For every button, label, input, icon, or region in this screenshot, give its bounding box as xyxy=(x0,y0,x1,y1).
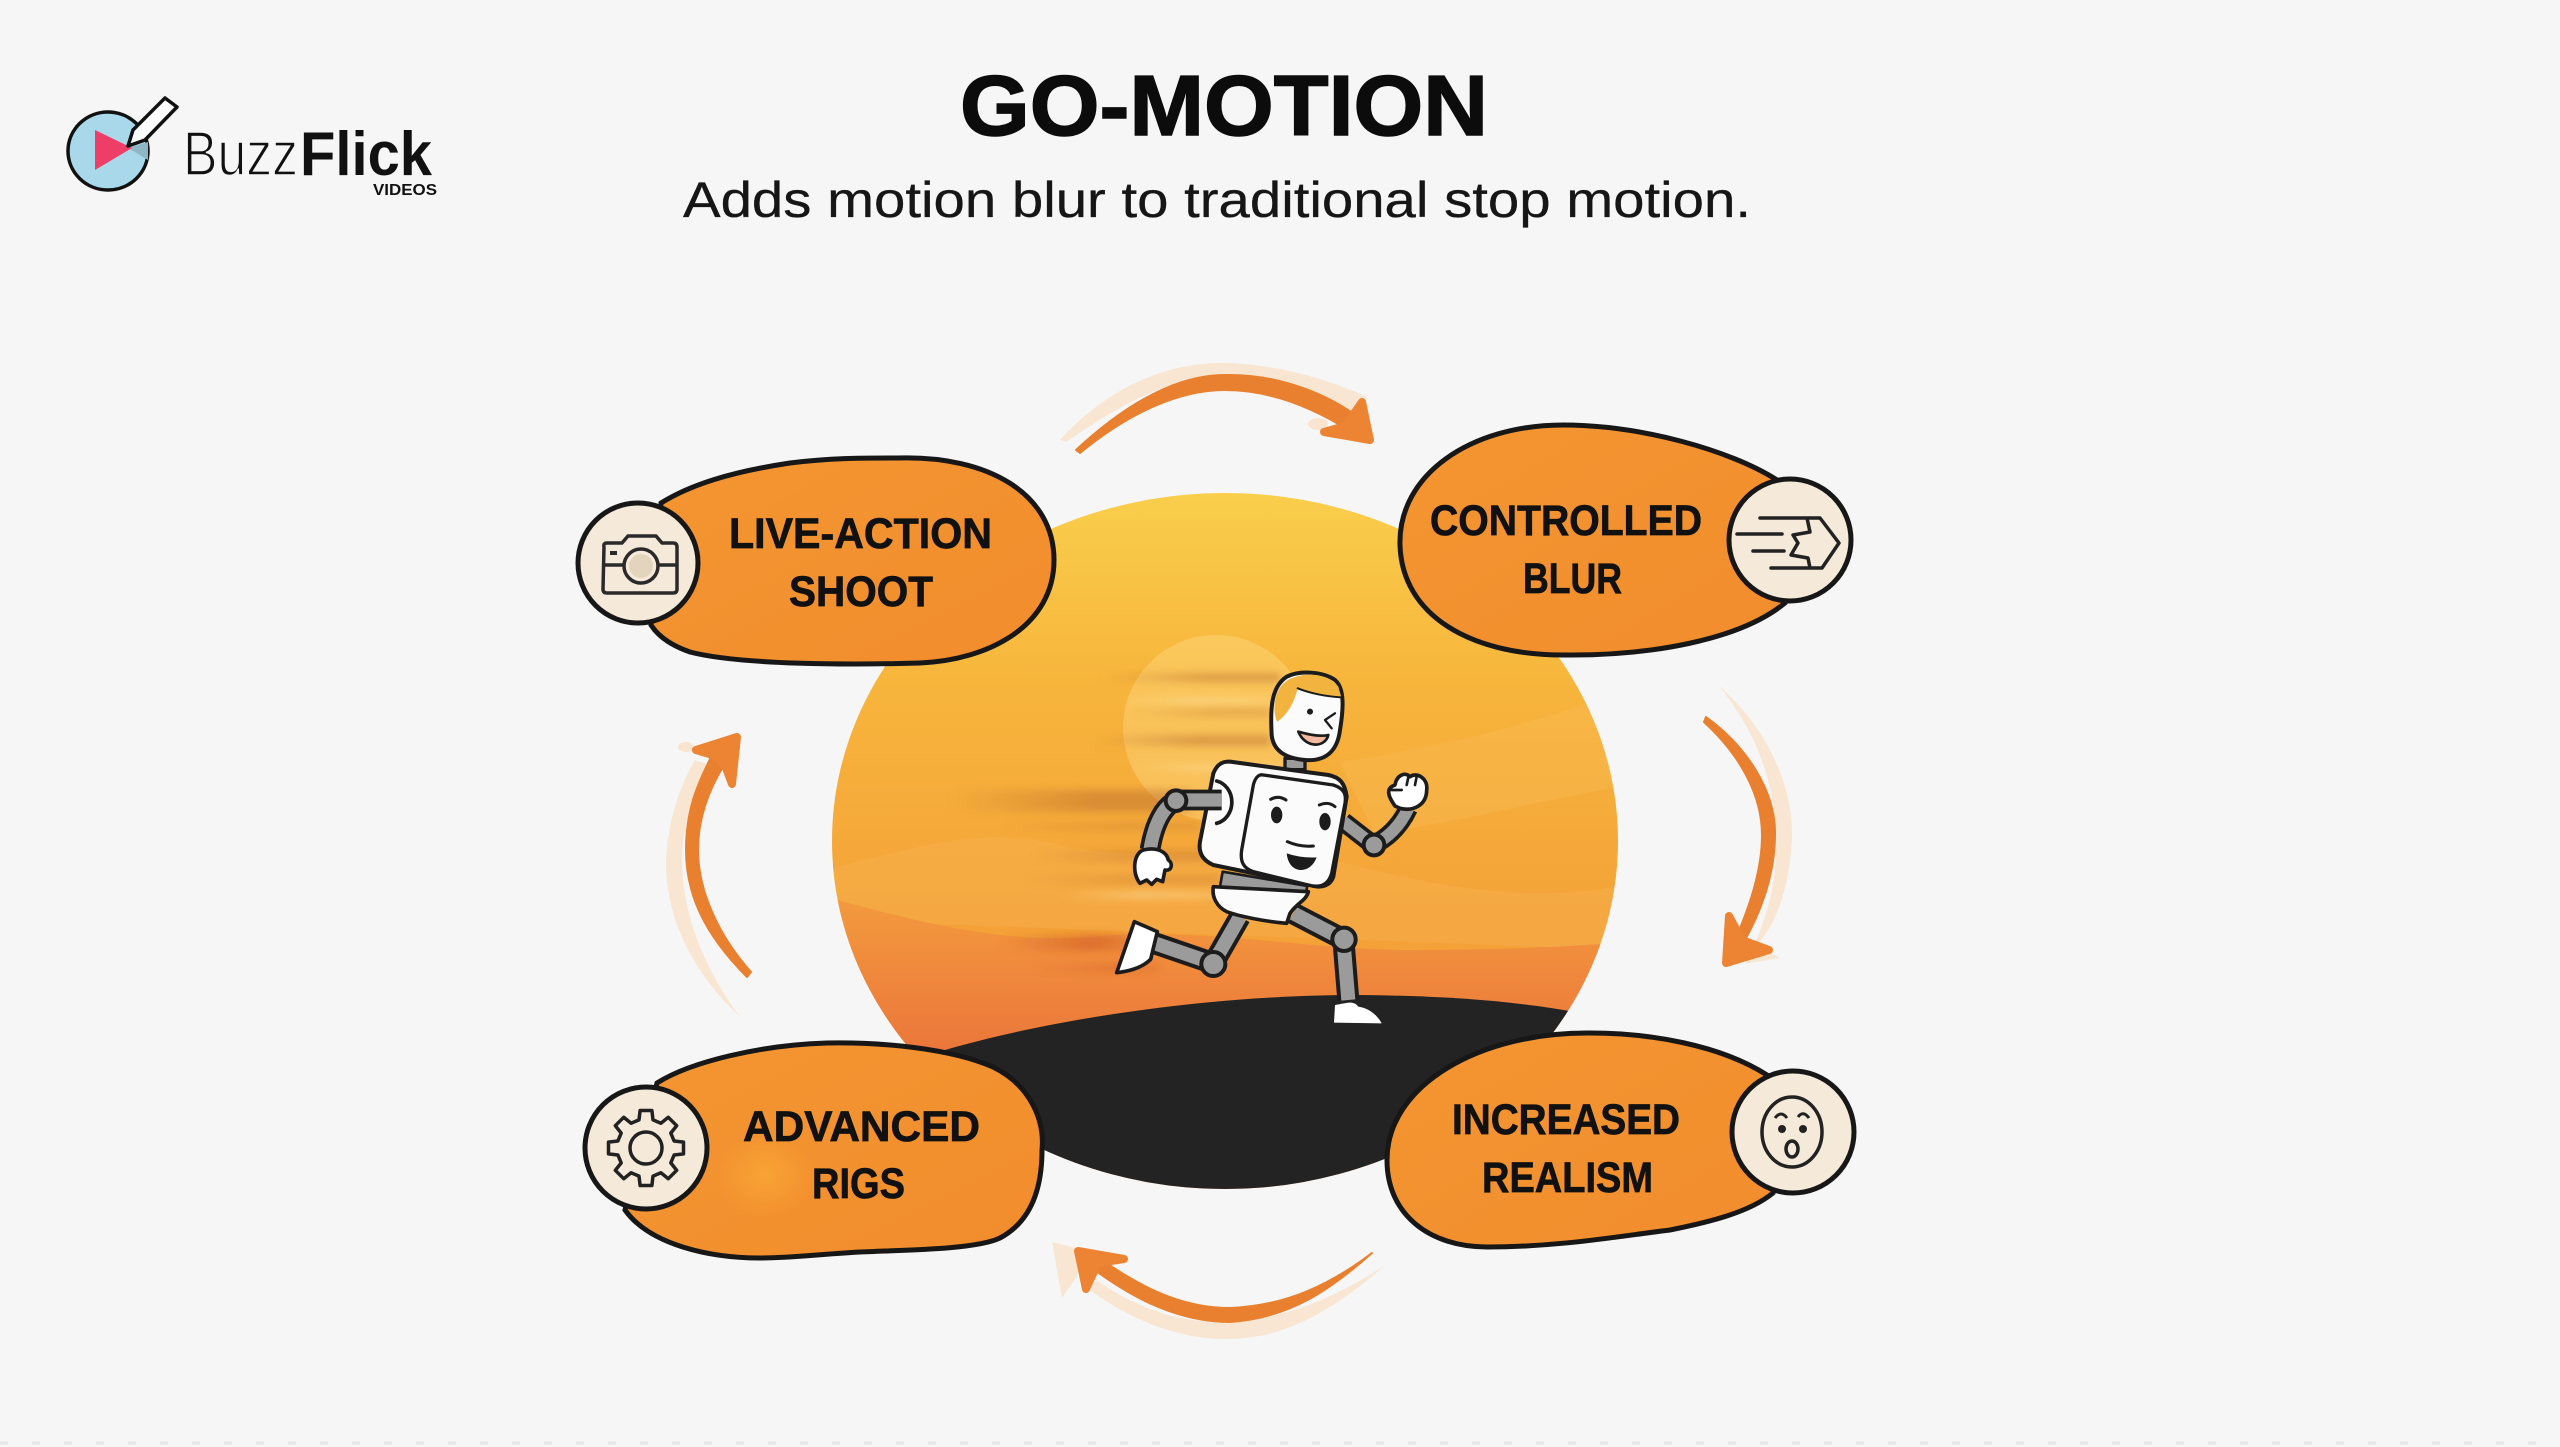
panel: live-action shoot xyxy=(578,458,1054,664)
icon: surprised face xyxy=(1732,1071,1854,1193)
icon: speeding arrow xyxy=(1729,479,1851,601)
label xyxy=(1452,1096,1680,1202)
neck xyxy=(1285,758,1305,770)
black hill xyxy=(945,995,1568,1189)
robot runner xyxy=(1117,673,1427,1023)
sun disc with landscape bands xyxy=(820,480,1640,1200)
panel: increased realism xyxy=(1387,1033,1854,1247)
label: BLUR xyxy=(1523,555,1622,603)
central sun scene xyxy=(820,480,1640,1200)
arrow: left, advanced rigs to live-action shoot xyxy=(666,737,751,1017)
pelvis xyxy=(1213,887,1308,923)
label xyxy=(729,510,992,616)
logo wordmark: VIDEOS xyxy=(373,182,437,199)
label xyxy=(1430,497,1702,603)
motion blur streaks xyxy=(950,673,1280,972)
logo: BuzzFlick Videos xyxy=(68,98,437,199)
label: REALISM xyxy=(1482,1154,1653,1202)
logo wordmark xyxy=(183,120,437,199)
label: RIGS xyxy=(812,1160,905,1208)
label: SHOOT xyxy=(789,568,933,616)
subtitle: Adds motion blur to traditional stop motion. xyxy=(683,172,1751,228)
label xyxy=(743,1103,980,1208)
logo wordmark: Buzz xyxy=(183,120,298,189)
arrow: bottom, increased realism to advanced rigs xyxy=(1052,1242,1385,1339)
label: CONTROLLED xyxy=(1430,497,1702,545)
head xyxy=(1271,673,1343,760)
front leg xyxy=(1293,913,1382,1023)
label: ADVANCED xyxy=(743,1103,980,1151)
left arm xyxy=(1135,790,1222,884)
panel: advanced rigs xyxy=(585,1043,1042,1258)
waist xyxy=(1220,872,1307,897)
label: LIVE-ACTION xyxy=(729,510,992,558)
logo wordmark: Flick xyxy=(300,120,432,189)
arrow: top, live-action to controlled blur xyxy=(1060,363,1370,453)
icon: play circle with pencil xyxy=(68,98,177,190)
right arm xyxy=(1343,774,1427,855)
icon: camera xyxy=(578,503,698,623)
back leg xyxy=(1117,917,1240,976)
title: GO-MOTION xyxy=(960,59,1488,154)
arrow: right, controlled blur to increased realism xyxy=(1704,685,1792,964)
torso xyxy=(1200,762,1347,887)
panel: controlled blur xyxy=(1400,425,1851,655)
icon: gear xyxy=(585,1087,707,1209)
pale inner sun xyxy=(1123,635,1291,820)
label: INCREASED xyxy=(1452,1096,1680,1144)
